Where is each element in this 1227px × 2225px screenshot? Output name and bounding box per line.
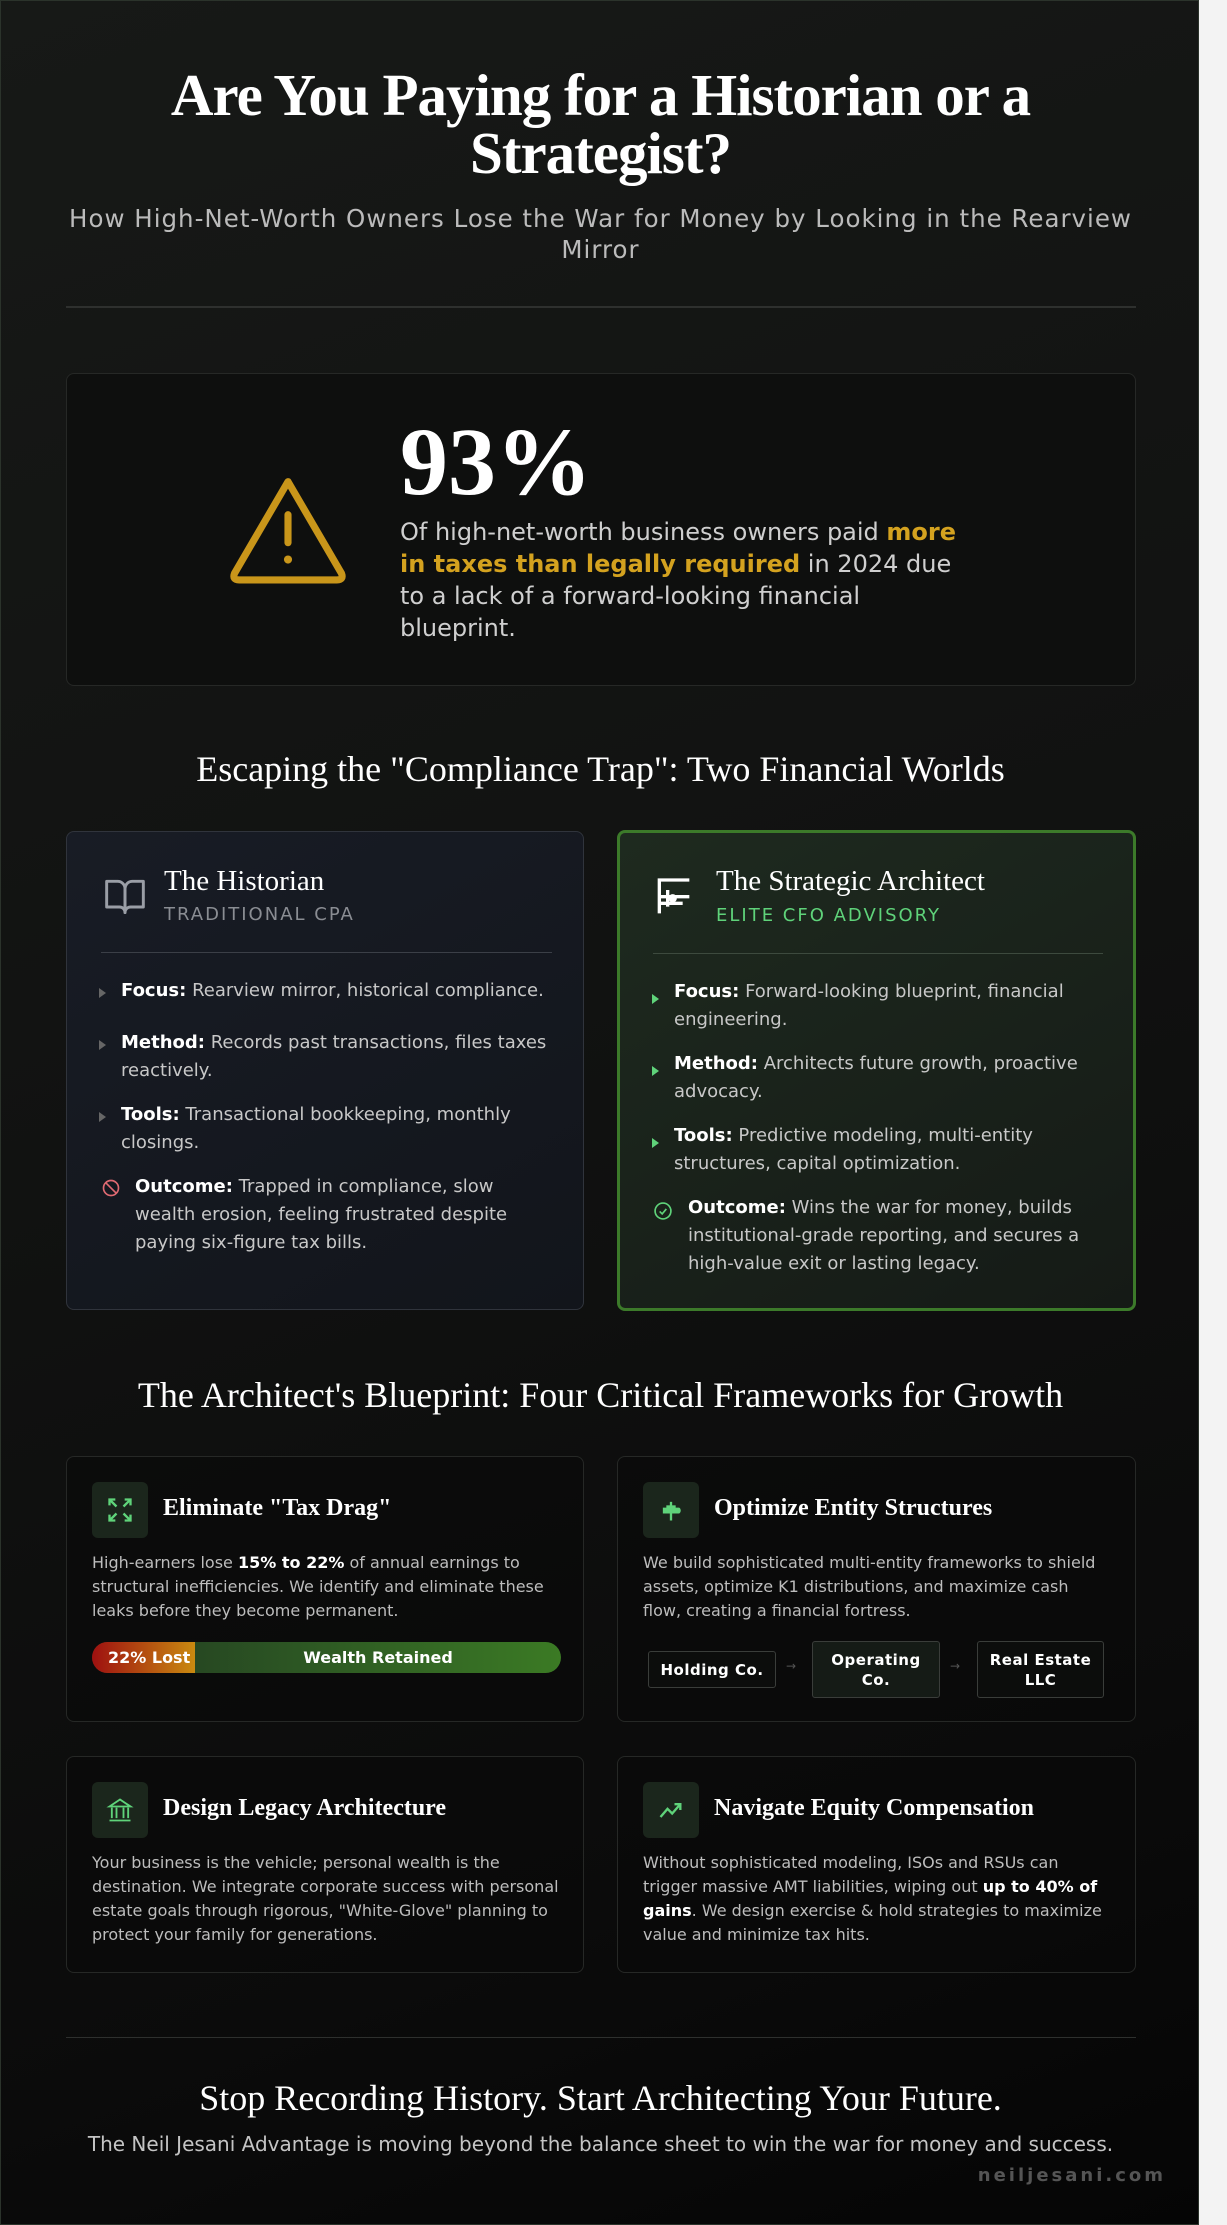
title: Strategist? xyxy=(470,120,731,186)
panel: legacy xyxy=(66,1756,584,1973)
stat text: Of high-net-worth business owners paid more in taxes than legally required in 2024 due to a lack of a forward-looking financial blueprint. xyxy=(400,518,956,642)
bar chart: wealth: Wealth Retained xyxy=(303,1648,453,1667)
title xyxy=(171,62,1030,186)
panel: tax drag: High-earners lose 15% to 22% of annual earnings to structural inefficiencies. We identify and eliminate these leaks before they become permanent. xyxy=(92,1553,544,1620)
footer heading: Stop Recording History. Start Architecting Your Future. xyxy=(199,2078,1002,2118)
panel: tax drag xyxy=(66,1456,584,1722)
bar chart: wealth: 22% Lost xyxy=(108,1648,190,1667)
diagram: entities: LLC xyxy=(1025,1670,1056,1688)
panel: entity structures: Optimize Entity Structures xyxy=(714,1495,992,1521)
title: Are You Paying for a Historian or a xyxy=(171,62,1030,128)
panel: equity: Navigate Equity Compensation xyxy=(714,1795,1034,1821)
list: architect points: Focus: Forward-looking blueprint, financial engineering. xyxy=(674,981,1064,1030)
panel: equity: Without sophisticated modeling, ISOs and RSUs can trigger massive AMT liabilities, wiping out up to 40% of gains. We design exercise & hold strategies to maximize value and minimize tax hits. xyxy=(643,1853,1102,1944)
panel: legacy: Your business is the vehicle; personal wealth is the destination. We integrate corporate success with personal estate goals through rigorous, "White-Glove" planning to protect your family for generations. xyxy=(92,1853,559,1944)
icon: expand xyxy=(92,1482,148,1538)
panel: tax drag: Eliminate "Tax Drag" xyxy=(163,1495,391,1521)
diagram: entities: Real Estate xyxy=(990,1650,1091,1668)
diagram: entities xyxy=(648,1641,1104,1698)
diagram: entities: Holding Co. xyxy=(660,1660,764,1678)
list: historian points: Outcome: Trapped in compliance, slow wealth erosion, feeling frustrated despite paying six-figure tax bills. xyxy=(135,1176,507,1253)
panel: entity structures: We build sophisticated multi-entity frameworks to shield assets, optimize K1 distributions, and maximize cash flow, creating a financial fortress. xyxy=(643,1553,1095,1620)
card title: The Strategic Architect xyxy=(716,865,985,897)
panel: entity structures xyxy=(617,1456,1136,1722)
icon: warning triangle xyxy=(230,478,346,584)
panel: historian: TRADITIONAL CPA xyxy=(164,904,355,925)
list: historian points: Tools: Transactional bookkeeping, monthly closings. xyxy=(121,1104,511,1153)
panel: historian xyxy=(66,831,584,1310)
panel: strategic architect xyxy=(617,830,1136,1311)
list: historian points xyxy=(99,980,546,1253)
big number: 93% xyxy=(400,408,592,515)
icon: blueprint xyxy=(658,878,690,914)
panel: stat callout xyxy=(66,373,1136,686)
subtitle: How High-Net-Worth Owners Lose the War for Money by Looking in the Rearview Mirror xyxy=(69,204,1132,264)
list: historian points: Method: Records past transactions, files taxes reactively. xyxy=(121,1032,546,1081)
panel: equity xyxy=(617,1756,1136,1973)
panel: strategic architect: ELITE CFO ADVISORY xyxy=(716,905,941,926)
list: architect points xyxy=(652,981,1079,1274)
diagram: entities: Co. xyxy=(862,1670,890,1688)
bar chart: wealth xyxy=(92,1642,561,1673)
card title: The Historian xyxy=(164,865,324,897)
list: historian points: Focus: Rearview mirror, historical compliance. xyxy=(121,980,544,1001)
footer text: The Neil Jesani Advantage is moving beyond the balance sheet to win the war for money and success. xyxy=(88,2132,1113,2156)
icon: trend xyxy=(643,1782,699,1838)
heading: two worlds: Escaping the "Compliance Trap": Two Financial Worlds xyxy=(196,749,1005,789)
brand: neiljesani.com xyxy=(978,2165,1166,2186)
diagram: entities: → xyxy=(950,1659,960,1673)
heading: frameworks: The Architect's Blueprint: Four Critical Frameworks for Growth xyxy=(138,1375,1063,1415)
diagram: entities: → xyxy=(786,1659,796,1673)
list: architect points: Tools: Predictive modeling, multi-entity structures, capital optimization. xyxy=(674,1125,1033,1174)
icon: structure xyxy=(643,1482,699,1538)
list: architect points: Method: Architects future growth, proactive advocacy. xyxy=(674,1053,1078,1102)
diagram: entities: Operating xyxy=(831,1650,921,1668)
panel: legacy: Design Legacy Architecture xyxy=(163,1795,446,1821)
icon: bank xyxy=(92,1782,148,1838)
icon: book xyxy=(105,880,145,914)
list: architect points: Outcome: Wins the war for money, builds institutional-grade reporting, and secures a high-value exit or lasting legacy. xyxy=(688,1197,1079,1274)
